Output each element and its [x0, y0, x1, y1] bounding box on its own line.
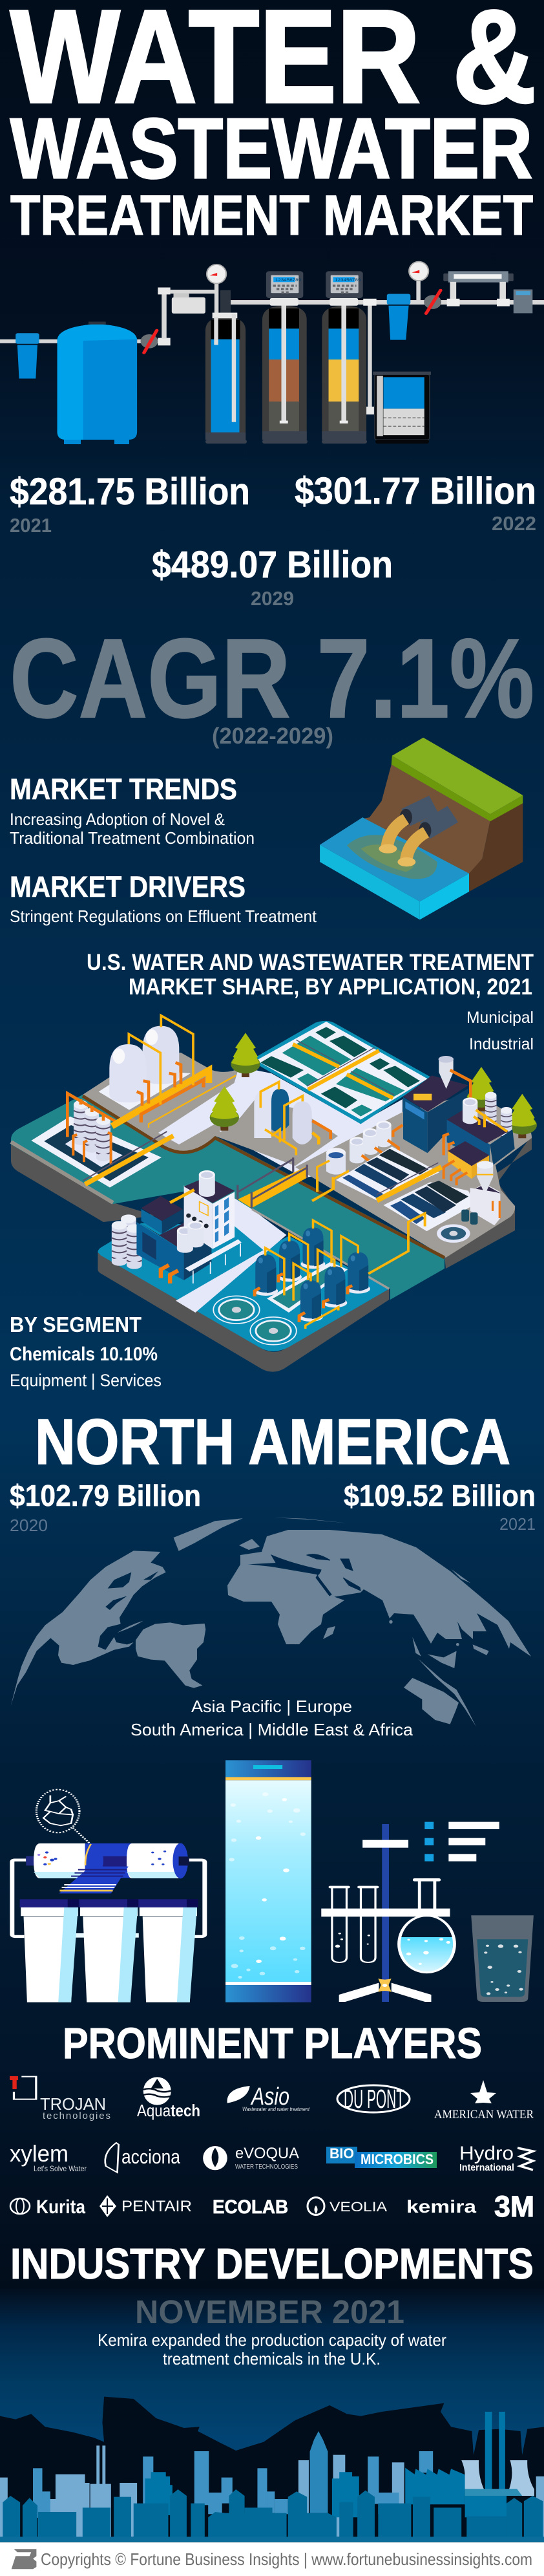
logo: Asio: Wastewater and water treatment — [242, 2106, 309, 2112]
plant: central bridge — [238, 1157, 307, 1208]
stat: North America 2020 — [10, 1479, 201, 1535]
logo: Ecolab: ECOLAB — [213, 2196, 288, 2218]
legend: applications: Industrial — [469, 1035, 534, 1053]
logo: Evoqua: eVOQUA — [235, 2145, 299, 2162]
map: Madagascar — [323, 1626, 335, 1639]
logo: Xylem: Let's Solve Water — [34, 2164, 87, 2173]
logo: Veolia — [308, 2197, 387, 2215]
footer bar — [0, 2542, 544, 2576]
logo: Kurita — [10, 2196, 85, 2218]
map: Southeast Asia and Oceania — [389, 1569, 489, 1726]
illustration: isometric treatment plant — [11, 1016, 537, 1372]
plant: ground surfaces — [11, 1053, 532, 1300]
map: Africa — [227, 1563, 344, 1644]
logo: DuPont — [337, 2084, 410, 2114]
text block: November 2021 news: NOVEMBER 2021 — [135, 2293, 404, 2330]
heading: prominent players: PROMINENT PLAYERS — [63, 2019, 482, 2068]
logo: Asio: Asio — [250, 2083, 289, 2110]
text block: by segment — [10, 1313, 162, 1390]
logo: Pentair: PENTAIR — [121, 2198, 192, 2215]
plant: central tanks and right buildings — [254, 1056, 537, 1203]
logo: Aquatech — [137, 2077, 200, 2120]
title — [10, 0, 536, 247]
plant: lower right basin — [383, 1181, 500, 1243]
text block: market drivers: MARKET DRIVERS — [10, 870, 246, 903]
logo: Hydro International — [459, 2143, 533, 2173]
logo: Trojan Technologies: technologies — [43, 2110, 110, 2121]
plant: lower buildings and blue tanks — [112, 1170, 425, 1329]
text block: other regions — [131, 1697, 413, 1739]
plant: top settling basin — [250, 1021, 432, 1124]
heading: U.S. market share — [87, 950, 534, 1000]
legend: applications: Municipal — [466, 1009, 534, 1027]
logo: American Water: AMERICAN WATER — [434, 2108, 534, 2121]
legend: applications — [466, 1009, 534, 1053]
map: Greenland and arctic — [173, 1518, 347, 1551]
stat: 2022 market value — [295, 470, 536, 535]
logo: Acciona: acciona — [121, 2145, 181, 2168]
stat: 2029 market value — [152, 544, 393, 610]
plant: lower pad — [98, 1198, 389, 1372]
map: seas cut-outs — [271, 1554, 361, 1596]
illustration: reverse osmosis filters — [12, 1790, 205, 2002]
illustration: water filtration system — [0, 262, 544, 440]
stat: 2029 market value: $489.07 Billion — [152, 544, 393, 586]
logo: Hydro International: International — [459, 2162, 514, 2173]
stat: CAGR: (2022-2029) — [212, 724, 333, 749]
text block: market drivers — [10, 870, 317, 926]
map: British Isles — [239, 1539, 260, 1550]
text block: market trends — [10, 773, 255, 848]
stat: North America 2021 — [344, 1479, 536, 1534]
map: Eurasia — [240, 1530, 531, 1657]
stat: 2021 market value: 2021 — [10, 514, 52, 537]
logo: Aquatech: Aquatech — [137, 2101, 200, 2120]
text block: by segment: BY SEGMENT — [10, 1313, 141, 1336]
text block: November 2021 news: Kemira expanded the production capacity of water — [98, 2330, 446, 2350]
stat: North America 2020: 2020 — [10, 1516, 48, 1535]
logo: Acciona — [105, 2143, 181, 2173]
text block: other regions: Asia Pacific | Europe — [191, 1697, 352, 1716]
text block: November 2021 news — [98, 2293, 446, 2368]
logo: BioMicrobics: MICROBICS — [361, 2151, 434, 2167]
logo: Xylem — [10, 2140, 87, 2173]
logo: Trojan Technologies: TROJAN — [40, 2094, 106, 2114]
illustration: laboratory equipment — [321, 1822, 499, 2002]
stat: 2029 market value: 2029 — [251, 587, 294, 610]
logo: Evoqua: WATER TECHNOLOGIES — [235, 2163, 298, 2171]
text block: November 2021 news: treatment chemicals in the U.K. — [163, 2349, 381, 2368]
logo: Hydro International: Hydro — [459, 2143, 514, 2164]
logo: Kurita: Kurita — [36, 2196, 85, 2218]
logo: Trojan Technologies — [10, 2076, 110, 2121]
stat: 2021 market value — [10, 471, 250, 537]
illustration: world map globe — [11, 1518, 531, 1726]
stat: North America 2020: $102.79 Billion — [10, 1479, 201, 1512]
logo: 3M: 3M — [494, 2190, 534, 2223]
illustration: tank feet — [64, 440, 429, 444]
logo: Veolia: VEOLIA — [330, 2200, 387, 2215]
logo: Xylem: xylem — [10, 2140, 68, 2167]
text block: other regions: South America | Middle East & Africa — [131, 1720, 413, 1739]
icon: Fortune Business Insights logo — [12, 2549, 36, 2569]
text block: market trends: Traditional Treatment Combination — [10, 828, 255, 848]
text block: by segment: Chemicals 10.10% — [10, 1344, 158, 1365]
logo: DuPont: DU PONT — [344, 2084, 404, 2114]
illustration: glass of water — [471, 1915, 534, 2002]
plant: left domes and silos — [31, 1016, 260, 1188]
stat: 2022 market value: 2022 — [492, 512, 536, 535]
logo: BioMicrobics — [326, 2145, 437, 2168]
text block: market trends: MARKET TRENDS — [10, 773, 237, 806]
text block: by segment: Equipment | Services — [10, 1371, 162, 1390]
text block: market drivers: Stringent Regulations on Effluent Treatment — [10, 907, 317, 926]
illustration: smoke clouds — [0, 2289, 544, 2455]
stat: North America 2021: 2021 — [499, 1514, 536, 1534]
logo: Evoqua — [203, 2145, 299, 2171]
map: the Americas — [11, 1551, 205, 1706]
logo: Asio — [227, 2083, 309, 2112]
illustration: water column — [225, 1760, 311, 2002]
logo: American Water — [434, 2080, 534, 2121]
logo: Pentair — [99, 2195, 192, 2217]
logo: BioMicrobics: BIO — [330, 2145, 354, 2162]
illustration: effluent outfall — [320, 738, 523, 919]
stat: 2021 market value: $281.75 Billion — [10, 471, 250, 513]
logo: Kemira: kemira — [406, 2196, 477, 2216]
text block: market trends: Increasing Adoption of Novel & — [10, 810, 225, 829]
illustration: city skyline — [0, 2412, 544, 2542]
